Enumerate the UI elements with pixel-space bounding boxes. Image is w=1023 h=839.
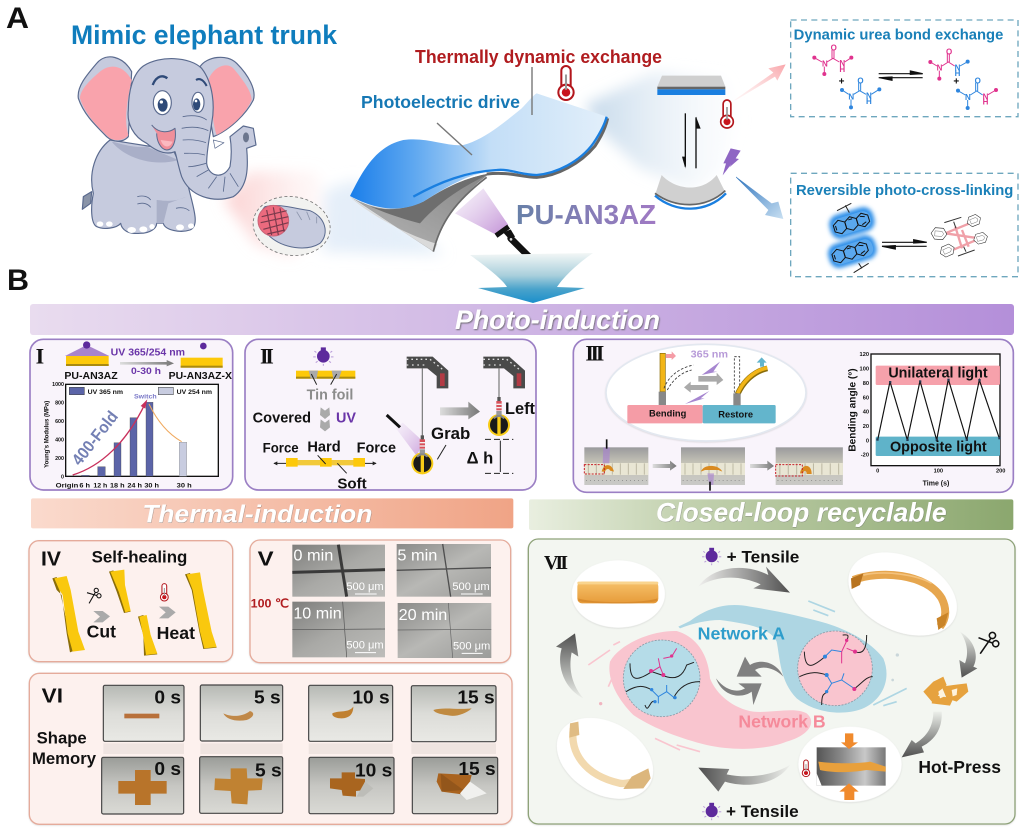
callout heading: Reversible photo-cross-linking: [796, 182, 1013, 199]
bending schematic ellipse: Bending: [649, 409, 687, 419]
leader lines: [437, 67, 532, 155]
line chart: bending angle: Opposite light: [890, 440, 987, 456]
masked film schematic: Force: [357, 441, 396, 457]
panel VI: shape memory: [29, 673, 512, 824]
section bar: closed-loop recyclable: Closed-loop recyclable: [656, 498, 947, 528]
panel label B: B: [7, 264, 29, 297]
photos: strip shape recovery: 0 s: [154, 687, 181, 708]
temperature label: 100 ℃: [251, 596, 289, 610]
bar chart: modulus: [44, 382, 218, 489]
callout heading: Dynamic urea bond exchange: [794, 27, 1003, 43]
reactant: pink urea: N: [839, 59, 845, 68]
bar chart: modulus: 400-Fold: [68, 407, 122, 469]
label: UV plus tensile top: + Tensile: [727, 547, 799, 566]
process arrow: [440, 402, 480, 419]
masked film schematic: Covered: [253, 411, 311, 427]
line chart: bending angle: 100: [860, 367, 869, 373]
panel V: microscopy healing: [250, 540, 511, 663]
icon: lightning: [723, 148, 741, 175]
sample before and after UV: 0-30 h: [131, 366, 161, 376]
panel label A: A: [6, 2, 29, 35]
sample: bent bar: [851, 573, 948, 630]
photos: cross shape recovery: 10 s: [355, 759, 392, 780]
masked film schematic: Soft: [337, 475, 367, 492]
line chart: bending angle: 120: [860, 352, 869, 358]
line chart: bending angle: -20: [861, 453, 869, 459]
arrow to photo-cross-linking: [736, 177, 783, 219]
label network A: Network A: [698, 623, 785, 643]
photos: cross shape recovery: 15 s: [458, 758, 496, 779]
masked film schematic: Tin foil: [307, 387, 353, 403]
micrographs: 500 μm: [346, 581, 384, 593]
gripper after light with height change: Left: [505, 400, 536, 418]
bar chart: modulus: 400: [55, 438, 64, 444]
section bar: thermal-induction: Thermal-induction: [142, 502, 372, 529]
arrow to urea bond exchange: [734, 64, 786, 101]
bar chart: modulus: UV 365 nm: [88, 390, 123, 396]
label: photoelectric drive: Photoelectric drive: [361, 92, 520, 112]
numeral II: II: [260, 343, 273, 368]
sample ellipses: [542, 536, 970, 815]
micrographs: 0 min: [293, 548, 333, 565]
reactant: pink urea: [812, 44, 853, 76]
micrographs: 500 μm: [453, 640, 490, 652]
photos: strip shape recovery: 10 s: [352, 687, 390, 708]
sample before and after UV: PU-AN3AZ-X: [169, 371, 232, 382]
heading: mimic elephant trunk: Mimic elephant trunk: [71, 20, 337, 50]
bending schematic ellipse: [606, 344, 806, 441]
photos: cross shape recovery: 0 s: [154, 758, 181, 779]
masked film schematic: [253, 347, 396, 492]
sample: recovered bent bar: [569, 722, 651, 789]
anthracene monomers with blue glow: [825, 203, 879, 273]
masked film schematic: Force: [263, 441, 299, 456]
central exchange arrows: [716, 657, 783, 705]
bar chart: modulus: 1000: [52, 382, 64, 388]
hot-press schematic: [802, 733, 886, 800]
reactant: pink urea: H: [839, 65, 845, 74]
section bar: photo-induction: [30, 304, 1014, 335]
product: mixed urea two: O: [975, 76, 981, 85]
micrographs: [292, 544, 491, 658]
label shape memory: Shape: [37, 728, 87, 747]
sample before and after UV: PU-AN3AZ: [64, 371, 118, 382]
section bar: thermal-induction: [31, 498, 513, 529]
line chart: bending angle: 80: [863, 381, 869, 387]
sample before and after UV: UV 365/254 nm: [111, 347, 185, 358]
network A blob: [678, 601, 907, 713]
masked film schematic: Hard: [307, 440, 341, 456]
product: mixed urea one: N: [937, 64, 943, 73]
section bar: photo-induction: Photo-induction: [455, 305, 660, 335]
molecular circle in network B: [623, 640, 700, 717]
dogbone samples and steps: Heat: [157, 623, 195, 643]
product: mixed urea one: N: [955, 64, 961, 73]
panel II: patterned hardening and grabbing: [245, 339, 536, 492]
section bar: closed-loop recyclable: [529, 498, 1013, 530]
line chart: bending angle: Unilateral light: [888, 365, 988, 381]
numeral III: III: [585, 341, 604, 366]
photo sequence of crawling film: [584, 439, 843, 491]
reactant: blue urea: N: [848, 92, 854, 101]
numeral IV: IV: [41, 548, 61, 571]
product: mixed urea two: [956, 76, 998, 110]
gripper after light with height change: [467, 357, 536, 473]
icon: small thermometer: [721, 100, 733, 128]
reactant: blue urea: N: [866, 92, 872, 101]
plus sign: +: [953, 77, 959, 88]
line chart: bending angle: Bending angle (°): [847, 368, 858, 452]
icon: thermometer: [558, 66, 574, 100]
reactant: blue urea: [840, 76, 881, 109]
reactant: pink urea: N: [822, 60, 828, 69]
heading: thermally dynamic exchange: Thermally dynamic exchange: [415, 47, 662, 67]
line chart: bending angle: 0: [876, 469, 879, 475]
gripper before light: Grab: [431, 424, 470, 443]
line chart: bending angle: 200: [996, 469, 1005, 475]
product: mixed urea one: [928, 48, 970, 81]
icon: flashlight with light beam: [455, 188, 528, 256]
label hot-press: Hot-Press: [918, 757, 1001, 777]
line chart: bending angle: 0: [866, 438, 869, 444]
reactant: blue urea: H: [866, 97, 872, 106]
numeral V: V: [258, 548, 274, 571]
gripper before light: [387, 357, 470, 474]
sample before and after UV: [64, 341, 232, 382]
photos: strip shape recovery: 15 s: [457, 687, 495, 708]
reactant: pink urea: O: [831, 44, 837, 53]
equilibrium arrows: [879, 71, 923, 80]
background light beams: [224, 72, 738, 258]
bar chart: modulus: 24 h: [127, 482, 142, 489]
panel IV: self-healing: [29, 541, 233, 662]
label network B: Network B: [738, 712, 826, 732]
product: mixed urea one: H: [955, 69, 961, 78]
bar chart: modulus: 800: [55, 401, 64, 407]
reflections: [103, 743, 496, 754]
network B blob: [588, 631, 811, 752]
micrographs: 20 min: [399, 607, 447, 624]
line chart: bending angle: Time (s): [923, 480, 949, 487]
line chart: bending angle: 20: [863, 424, 869, 430]
panel VII: closed-loop recycling: [528, 536, 1015, 824]
gripper after light with height change: Δ h: [467, 448, 493, 467]
bar chart: modulus: 6 h: [79, 482, 90, 489]
label: UV plus tensile bottom: + Tensile: [726, 802, 799, 821]
material name: PU-AN3AZ: [516, 199, 656, 230]
bending schematic ellipse: Restore: [718, 409, 753, 419]
sample: cut pieces: [923, 677, 968, 706]
micrographs: 5 min: [397, 548, 437, 565]
photos: strip shape recovery: 5 s: [254, 687, 281, 708]
micrographs: 500 μm: [346, 640, 384, 652]
molecular circle in network A: [798, 631, 873, 706]
line chart: bending angle: [847, 352, 1005, 487]
bilayer state diagram: [655, 76, 726, 209]
photos: cross shape recovery: [102, 757, 498, 814]
product: mixed urea one: O: [946, 48, 952, 57]
line chart: bending angle: 60: [863, 395, 869, 401]
callout box: dynamic urea bond exchange: [791, 20, 1018, 117]
product: mixed urea two: H: [983, 98, 989, 107]
dogbone samples and steps: [52, 570, 217, 656]
product: mixed urea two: N: [983, 92, 989, 101]
bar chart: modulus: Young's Modulus (MPa): [44, 401, 50, 468]
recycling loop arrows: [556, 567, 977, 792]
heading self-healing: Self-healing: [92, 547, 187, 566]
photos: strip shape recovery: [103, 685, 496, 742]
bar chart: modulus: 200: [55, 456, 64, 462]
line chart: bending angle: 40: [863, 410, 869, 416]
bar chart: modulus: Switch: [134, 394, 157, 401]
bending schematic ellipse: 365 nm: [691, 349, 728, 360]
equilibrium arrows: [882, 240, 927, 249]
trunk detail close-up: [249, 192, 334, 260]
line chart: bending angle: 100: [934, 469, 943, 475]
bar chart: modulus: 18 h: [110, 482, 125, 489]
panel III: bending and restore: [573, 339, 1013, 492]
bar chart: modulus: 30 h: [144, 482, 159, 489]
label memory: Memory: [32, 749, 97, 768]
numeral VII: VII: [544, 552, 568, 574]
teal down arrow: [470, 253, 593, 303]
photodimer structure: [931, 213, 989, 259]
dogbone samples and steps: Cut: [87, 622, 116, 642]
micrographs: 10 min: [293, 606, 342, 623]
photos: cross shape recovery: 5 s: [255, 759, 282, 780]
section A: elephant trunk concept: [71, 20, 786, 303]
bar chart: modulus: UV 254 nm: [177, 390, 212, 396]
numeral I: I: [36, 343, 44, 368]
bar chart: modulus: 12 h: [93, 482, 107, 489]
bar chart: modulus: 30 h: [177, 482, 192, 489]
main film sheet with bilayer: [350, 93, 608, 252]
callout box: reversible photo-cross-linking: [791, 173, 1018, 277]
bar chart: modulus: 600: [55, 419, 64, 425]
sample: bar: [577, 582, 658, 603]
micrographs: 500 μm: [452, 581, 490, 593]
product: mixed urea two: N: [965, 93, 971, 102]
bar chart: modulus: 0: [61, 474, 64, 480]
panel I: Young's modulus under UV: [30, 339, 233, 490]
icon: scissors: [976, 631, 1000, 654]
bar chart: modulus: Origin: [56, 482, 78, 489]
icon: cartoon elephant: [78, 57, 256, 233]
masked film schematic: UV: [336, 411, 356, 427]
reactant: blue urea: O: [857, 76, 864, 85]
plus sign: +: [839, 77, 845, 88]
numeral VI: VI: [42, 684, 63, 707]
